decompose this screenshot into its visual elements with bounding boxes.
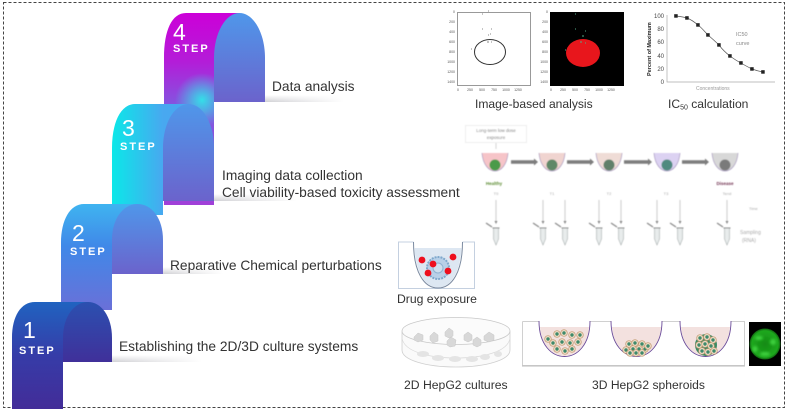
fluorescent spheroid image [749, 322, 781, 366]
segmentation plot: labelled mask: 800 [542, 50, 548, 54]
step 2 label: 2 [72, 220, 85, 246]
time-course diagram: (RNA) [742, 238, 756, 244]
step 3 ribbon [112, 104, 214, 215]
caption: 3D spheroids: 3D HepG2 spheroids [592, 378, 705, 392]
sampling tubes [486, 221, 730, 245]
IC50 chart: 20 [657, 67, 665, 73]
compact spheroid [695, 334, 717, 356]
step 4 label: 4 [173, 19, 186, 45]
wells [482, 153, 738, 171]
segmentation plot: labelled mask: 1000 [595, 88, 603, 92]
IC50 chart: Concentrations [696, 86, 730, 92]
segmentation plot: labelled mask: 200 [542, 20, 548, 24]
IC50 chart: 40 [657, 54, 665, 60]
IC50 chart: IC50 [736, 32, 748, 38]
step 2 shadow [163, 267, 243, 274]
time-course diagram: Healthy [486, 181, 503, 186]
caption: image-based analysis: Image-based analysis [475, 97, 593, 111]
IC50 chart: Percent of Maximum [647, 22, 653, 76]
segmentation plot: outline: 400 [449, 30, 455, 34]
segmentation plot: outline: 200 [449, 20, 455, 24]
segmentation plot: outline: 750 [491, 88, 497, 92]
segmentation plot: labelled mask: 0 [550, 88, 552, 92]
time-course diagram: Sampling [740, 230, 761, 236]
segmentation plot: outline: 1400 [447, 80, 455, 84]
segmentation plot: outline [447, 10, 530, 92]
segmentation plot: labelled mask: 250 [560, 88, 566, 92]
segmentation plot: outline: 0 [453, 10, 455, 14]
caption: IC50 calculation: IC [668, 97, 680, 111]
segmentation plot: labelled mask: 500 [572, 88, 578, 92]
time-course diagram: Tend [723, 191, 731, 196]
step 4 description: Data analysis [272, 79, 355, 94]
segmentation plot: outline: 1250 [514, 88, 522, 92]
IC50 chart: curve [736, 41, 749, 47]
aggregating cells [623, 340, 651, 356]
step 2 ribbon [61, 204, 163, 310]
segmentation plot: labelled mask: 1200 [540, 70, 548, 74]
segmentation plot: outline: 1200 [447, 70, 455, 74]
segmentation plot: labelled mask: 1250 [607, 88, 615, 92]
segmentation plot: outline: 1000 [447, 60, 455, 64]
step 3 description [222, 168, 460, 200]
step 1 shadow [112, 355, 232, 362]
time-course diagram: T0 [494, 191, 499, 196]
step 2 ribbon: STEP [70, 246, 107, 258]
step 3 description: Imaging data collection [222, 168, 363, 183]
time-course diagram: T1 [550, 191, 555, 196]
segmentation plot: labelled mask: 1000 [540, 60, 548, 64]
segmentation plot: outline: 600 [449, 40, 455, 44]
caption: IC50 calculation: calculation [688, 97, 748, 111]
step 3 ribbon: STEP [120, 141, 157, 153]
progress arrows [511, 158, 709, 166]
segmentation plot: outline: 250 [467, 88, 473, 92]
IC50 chart: 80 [657, 27, 665, 33]
segmentation plot: labelled mask: 400 [542, 30, 548, 34]
step 1 label: 1 [23, 317, 36, 343]
caption: 2D cultures: 2D HepG2 cultures [404, 378, 508, 392]
caption: drug exposure: Drug exposure [397, 292, 477, 306]
time-course diagram: Time [749, 206, 759, 211]
step 3 label: 3 [122, 115, 135, 141]
step 2 description: Reparative Chemical perturbations [170, 258, 382, 273]
IC50 chart: 0 [661, 80, 665, 86]
step 1 description: Establishing the 2D/3D culture systems [119, 339, 358, 354]
time-course diagram: exposure [487, 135, 506, 140]
step 4 ribbon [164, 13, 265, 205]
time-course diagram: Disease [716, 181, 734, 186]
segmentation plot: labelled mask: 750 [584, 88, 590, 92]
IC50 chart: 100 [654, 14, 665, 20]
time-course diagram: T2 [607, 191, 612, 196]
step 3 shadow [214, 194, 324, 201]
drug exposure well [398, 242, 474, 288]
time-course diagram: T3 [664, 191, 669, 196]
caption: IC50 calculation: 50 [680, 104, 688, 112]
segmentation plot: labelled mask: 1400 [540, 80, 548, 84]
step 4 ribbon: STEP [173, 43, 210, 55]
segmentation plot: labelled mask [540, 10, 624, 92]
time-course diagram: Long-term low dose [476, 128, 516, 133]
step 1 ribbon [12, 302, 112, 409]
segmentation plot: labelled mask: 600 [542, 40, 548, 44]
IC50 chart: 60 [657, 40, 665, 46]
step 1 ribbon: STEP [19, 345, 56, 357]
time-course diagram [466, 126, 761, 245]
segmentation plot: outline: 0 [457, 88, 459, 92]
step 3 description: Cell viability-based toxicity assessment [222, 185, 460, 200]
segmentation plot: outline: 800 [449, 50, 455, 54]
step 4 shadow [265, 95, 370, 102]
IC50 chart [647, 14, 775, 92]
segmentation plot: outline: 1000 [502, 88, 510, 92]
segmentation plot: outline: 500 [479, 88, 485, 92]
segmentation plot: labelled mask: 0 [546, 10, 548, 14]
dispersed cells [545, 330, 583, 354]
2D culture dish [402, 318, 510, 367]
3D spheroid wells [522, 320, 745, 366]
